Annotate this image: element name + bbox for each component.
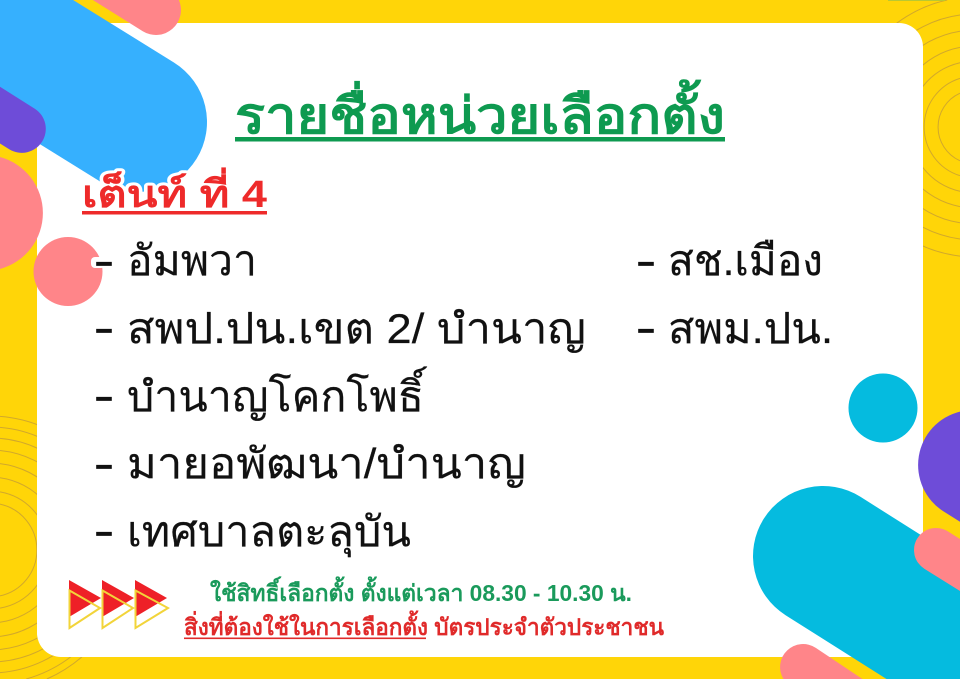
- title: รายชื่อหน่วยเลือกตั้ง: [235, 79, 725, 144]
- item 3: -: [94, 372, 114, 419]
- shape: teal circle: [848, 374, 918, 442]
- item 1: อัมพวา: [127, 237, 257, 284]
- item 5: เทศบาลตะลุบัน: [127, 508, 411, 558]
- item 2: สพป.ปน.เขต 2/ บำนาญ: [127, 305, 586, 353]
- item 2: -: [94, 304, 114, 351]
- item 5: -: [94, 507, 114, 554]
- item 7: -: [636, 304, 656, 351]
- heading: tent 4: เต็นท์ ที่ 4: [82, 167, 267, 216]
- shape: blue capsule: [0, 0, 207, 192]
- shape: large teal capsule: [753, 486, 960, 679]
- top edge sliver: [888, 0, 945, 1]
- shape: bottom pink capsule: [780, 644, 862, 679]
- item 4: -: [94, 440, 114, 487]
- item 4: มายอพัฒนา/บำนาญ: [127, 440, 526, 488]
- shape: purple capsule: [0, 87, 46, 153]
- concentric rings top right: [845, 0, 960, 256]
- item 7: สพม.ปน.: [668, 305, 833, 352]
- list: right column: [636, 237, 833, 352]
- icon: triple arrows: [69, 580, 168, 628]
- required document note: สิ่งที่ต้องใช้ในการเลือกตั้ง บัตรประจำตัวประชาชน: [184, 610, 664, 640]
- item 6: สช.เมือง: [668, 237, 823, 284]
- item 1: -: [94, 237, 114, 284]
- shape: left pink circle: [0, 157, 43, 269]
- item 3: บำนาญโคกโพธิ์: [127, 366, 427, 421]
- shape: top pink capsule: [93, 0, 181, 35]
- shape: right pink capsule: [914, 528, 960, 591]
- concentric rings bottom left: [0, 416, 124, 679]
- shape: small pink circle: [34, 237, 102, 306]
- shape: right purple capsule: [918, 412, 960, 522]
- voting time note: ใช้สิทธิ์เลือกตั้ง ตั้งแต่เวลา 08.30 - 10.30 น.: [210, 576, 632, 606]
- list: left column: [91, 237, 586, 558]
- item 6: -: [636, 237, 656, 284]
